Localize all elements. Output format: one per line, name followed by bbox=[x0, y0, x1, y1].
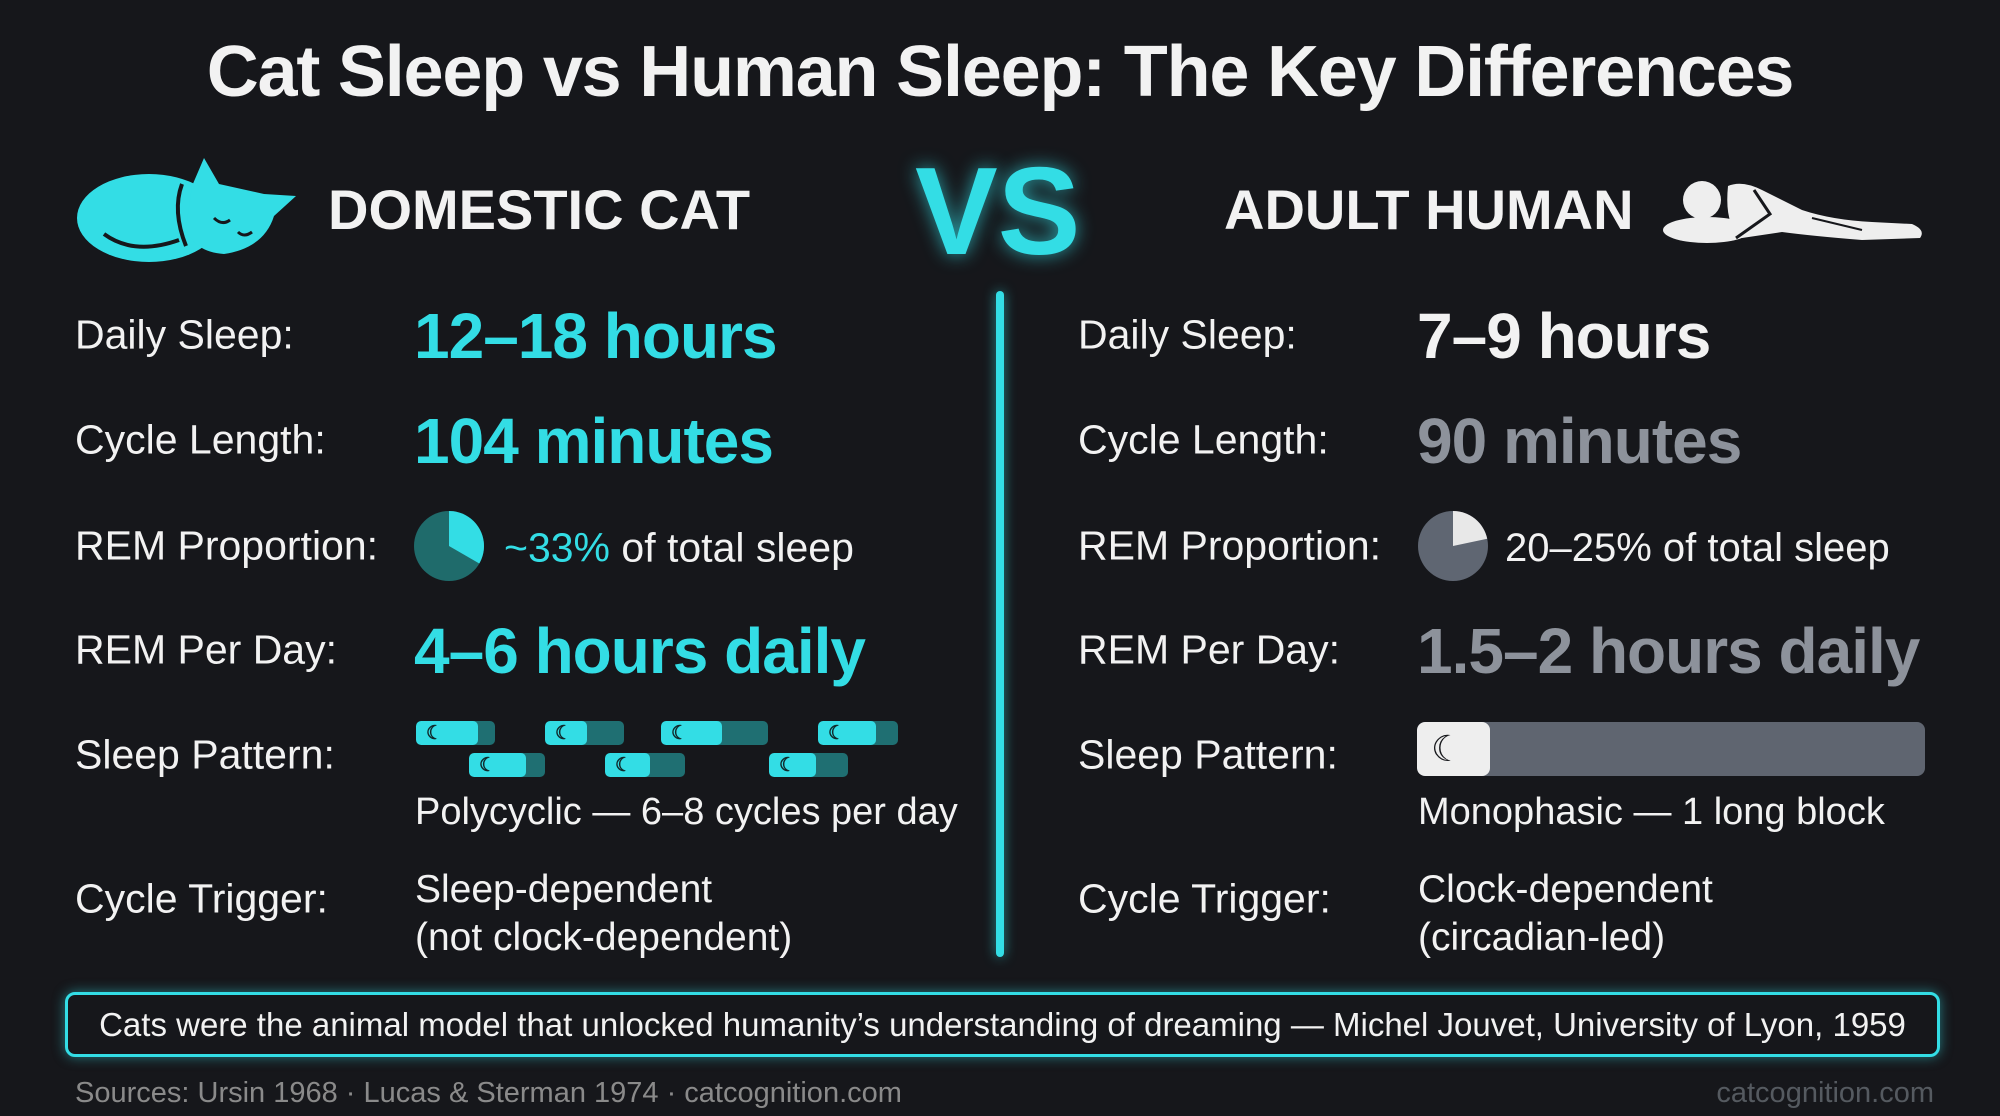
cat labels bbox=[75, 312, 378, 922]
cat cycle trigger: Sleep-dependent bbox=[415, 868, 712, 911]
VS badge: VS bbox=[915, 143, 1080, 281]
cat sleep pattern bars: ☾ bbox=[555, 723, 572, 744]
human cycle trigger bbox=[1418, 868, 1713, 959]
callout: quote: Cats were the animal model that unlocked humanity’s understanding of dreaming — Michel Jouvet, University of Lyon, 1959 bbox=[99, 1006, 1906, 1043]
human labels: Cycle Trigger: bbox=[1078, 876, 1331, 922]
human sleep pattern bar: ☾ bbox=[1431, 728, 1463, 769]
human labels bbox=[1078, 312, 1381, 922]
human value: daily sleep: 7–9 hours bbox=[1417, 300, 1710, 372]
human value: REM per day: 1.5–2 hours daily bbox=[1417, 615, 1919, 687]
human value: cycle length: 90 minutes bbox=[1417, 405, 1741, 477]
cat sleep pattern bars: ☾ bbox=[828, 723, 845, 744]
cat value: cycle length: 104 minutes bbox=[414, 405, 773, 477]
cat pie chart bbox=[414, 511, 484, 581]
human cycle trigger: (circadian-led) bbox=[1418, 916, 1665, 959]
cat value: REM per day: 4–6 hours daily bbox=[414, 615, 865, 687]
cat sleep pattern bars bbox=[416, 721, 898, 777]
human cycle trigger: Clock-dependent bbox=[1418, 868, 1713, 911]
cat sleep pattern bars: ☾ bbox=[671, 723, 688, 744]
human sleep pattern bar bbox=[1417, 722, 1925, 776]
sources: Sources: Ursin 1968 · Lucas & Sterman 1974 · catcognition.com bbox=[75, 1077, 902, 1109]
cat sleep pattern bars: ☾ bbox=[779, 755, 796, 776]
cat labels: Cycle Length: bbox=[75, 416, 326, 462]
human labels: REM Per Day: bbox=[1078, 626, 1340, 672]
heading: adult human: ADULT HUMAN bbox=[1224, 178, 1634, 241]
cat REM proportion text: ~33% of total sleep bbox=[504, 524, 854, 570]
human labels: Daily Sleep: bbox=[1078, 312, 1297, 358]
human pattern caption: Monophasic — 1 long block bbox=[1418, 791, 1885, 833]
cat labels: REM Per Day: bbox=[75, 626, 337, 672]
human REM proportion text: 20–25% of total sleep bbox=[1505, 526, 1890, 570]
cat labels: Cycle Trigger: bbox=[75, 876, 328, 922]
watermark: catcognition.com bbox=[1716, 1077, 1934, 1109]
cat labels: REM Proportion: bbox=[75, 522, 378, 568]
cat cycle trigger: (not clock-dependent) bbox=[415, 916, 792, 959]
human labels: REM Proportion: bbox=[1078, 522, 1381, 568]
human pie chart bbox=[1418, 511, 1488, 581]
human labels: Cycle Length: bbox=[1078, 416, 1329, 462]
title: Cat Sleep vs Human Sleep: The Key Differences bbox=[207, 32, 1793, 112]
cat cycle trigger bbox=[415, 868, 792, 959]
human labels: Sleep Pattern: bbox=[1078, 732, 1338, 778]
cat pattern caption: Polycyclic — 6–8 cycles per day bbox=[415, 791, 958, 833]
icon: sleeping cat bbox=[77, 158, 296, 262]
callout: quote bbox=[65, 992, 1940, 1057]
cat labels: Sleep Pattern: bbox=[75, 732, 335, 778]
cat labels: Daily Sleep: bbox=[75, 312, 294, 358]
cat value: daily sleep: 12–18 hours bbox=[414, 300, 777, 372]
heading: domestic cat: DOMESTIC CAT bbox=[328, 178, 750, 241]
cat sleep pattern bars: ☾ bbox=[615, 755, 632, 776]
icon: sleeping human bbox=[1663, 181, 1922, 243]
cat sleep pattern bars: ☾ bbox=[479, 755, 496, 776]
divider line bbox=[996, 291, 1004, 957]
cat sleep pattern bars: ☾ bbox=[426, 723, 443, 744]
